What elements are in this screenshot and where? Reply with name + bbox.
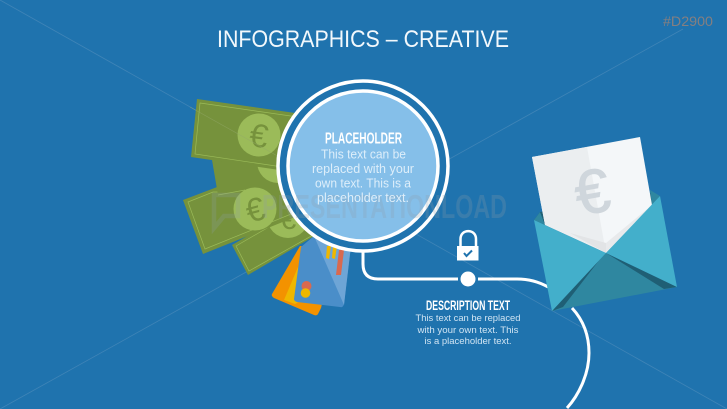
title: INFOGRAPHICS – CREATIVE: [217, 26, 509, 53]
watermark: PRESENTATIONLOAD: [262, 188, 507, 225]
icon: credit cards: [272, 236, 352, 315]
orange card: [272, 246, 335, 315]
circle body text: This text can be: [321, 148, 406, 162]
description body text: [416, 313, 520, 347]
main circle: [278, 81, 448, 251]
banknote 1: €: [247, 116, 271, 155]
letter: €: [569, 156, 615, 229]
blue card: [294, 236, 352, 307]
connector node: [460, 272, 476, 286]
envelope pockets: [552, 253, 677, 311]
connector line: [363, 250, 589, 408]
description body text: is a placeholder text.: [424, 336, 512, 347]
banknote 2: [212, 141, 345, 195]
description body text: This text can be replaced: [416, 313, 520, 324]
watermark: [214, 188, 507, 228]
banknote 3: [183, 148, 345, 254]
banknote 4: €: [280, 203, 297, 236]
icon: banknotes: [183, 99, 350, 275]
circle body text: own text. This is a: [315, 176, 411, 190]
icon: open padlock with check: [457, 231, 478, 260]
circle body text: replaced with your: [312, 162, 414, 176]
banknote 1: [190, 99, 330, 176]
envelope inside: [534, 193, 660, 253]
icon: envelope with euro letter: [532, 137, 677, 311]
description body text: with your own text. This: [416, 325, 519, 336]
banknote 3 coin: [234, 188, 276, 230]
banknote 4: [232, 196, 350, 275]
circle text: [312, 130, 414, 205]
circle body text: placeholder text.: [317, 191, 409, 205]
circle body text: [312, 148, 414, 205]
description heading: DESCRIPTION TEXT: [426, 298, 510, 313]
banknote 3 coin: €: [241, 189, 269, 230]
letter: [532, 137, 652, 253]
circle heading: PLACEHOLDER: [325, 130, 402, 148]
color code label: #D2900: [663, 13, 713, 29]
